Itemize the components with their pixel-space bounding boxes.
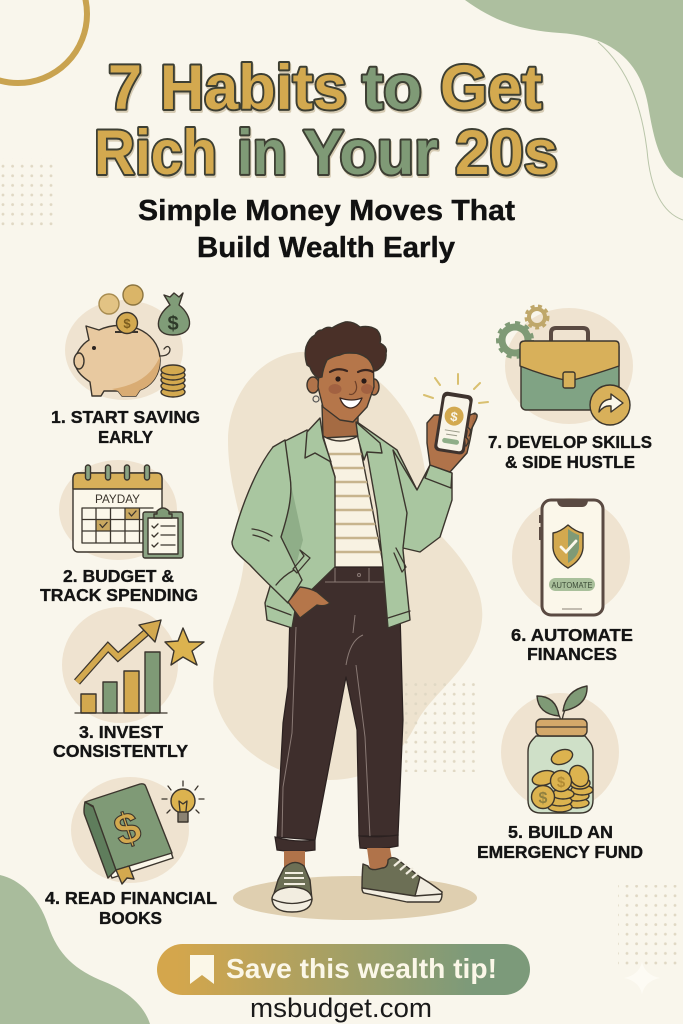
left shoe — [272, 862, 312, 912]
label: 6. AUTOMATE — [511, 625, 633, 645]
panel: habit 3 — [53, 607, 204, 761]
jacket right panel — [357, 422, 417, 628]
ear right — [369, 379, 379, 395]
label: 4. READ FINANCIAL — [45, 888, 217, 908]
icon: phone with shield — [512, 498, 630, 616]
label — [511, 625, 633, 664]
title: Habits — [160, 53, 347, 123]
icon: coin jar with sprout — [501, 686, 619, 813]
label: TRACK SPENDING — [40, 585, 198, 605]
icon: payday calendar and checklist: PAYDAY — [95, 492, 140, 506]
jacket body shadow — [281, 480, 303, 565]
face — [318, 353, 374, 422]
label: 2. BUDGET & — [63, 566, 174, 586]
decorative bottom-left green blob — [0, 875, 150, 1024]
panel: habit 2 — [40, 460, 198, 605]
raised hand — [427, 413, 475, 472]
call to action pill — [157, 944, 530, 995]
beige blob behind the person — [213, 352, 482, 780]
right shoe — [362, 858, 442, 902]
title: Your — [303, 118, 438, 188]
smile — [340, 398, 362, 408]
dot grid over blob — [405, 680, 477, 772]
panel: habit 6 — [511, 498, 633, 664]
icon: piggy bank: $ — [123, 316, 131, 331]
hair — [305, 322, 386, 378]
icon: piggy bank: $ — [167, 313, 179, 335]
jacket details — [252, 465, 452, 618]
subtitle — [138, 195, 515, 264]
label: 1. START SAVING — [51, 407, 200, 427]
label: 7. DEVELOP SKILLS — [488, 432, 652, 452]
label: EMERGENCY FUND — [477, 842, 643, 862]
label: FINANCES — [527, 644, 617, 664]
panel: habit 4 — [45, 777, 217, 928]
label: 3. INVEST — [79, 722, 163, 742]
label: CONSISTENTLY — [53, 741, 188, 761]
title: in — [237, 118, 287, 188]
pill text: Save this wealth tip! — [226, 953, 497, 984]
label: BOOKS — [99, 908, 162, 928]
label: 5. BUILD AN — [508, 822, 613, 842]
trouser details — [282, 568, 384, 837]
title: 20s — [455, 118, 558, 188]
icon: coin jar with sprout: $ — [557, 774, 566, 791]
ankles — [284, 848, 392, 870]
neck — [322, 405, 358, 438]
label — [488, 432, 652, 472]
label — [53, 722, 188, 761]
pocket hand — [288, 587, 330, 618]
panel: habit 1 — [51, 285, 200, 447]
icon: briefcase, gears and arrow — [498, 306, 633, 425]
subtitle: Simple Money Moves That — [138, 195, 515, 227]
jacket collars — [305, 418, 382, 462]
website footer: msbudget.com — [250, 993, 432, 1023]
icon: bookmark — [190, 955, 214, 984]
title: Get — [440, 53, 542, 123]
left jacket sleeve — [232, 440, 302, 603]
decorative top-left gold ring — [0, 0, 87, 83]
icon: finance book and light bulb: $ — [108, 802, 147, 856]
icon: growth chart and star — [62, 607, 204, 723]
cheeks — [328, 384, 373, 394]
phone — [433, 391, 473, 455]
trouser cuffs — [275, 835, 398, 852]
panel: habit 7 — [488, 306, 652, 472]
phone shine rays — [424, 374, 488, 403]
decorative sparkle — [624, 962, 660, 994]
eyes and brows — [330, 369, 373, 394]
person illustration — [232, 322, 488, 912]
icon: phone with shield: AUTOMATE — [552, 581, 592, 590]
decorative dot grids — [0, 158, 683, 967]
decorative top-right green blob — [465, 0, 683, 220]
title: to — [362, 53, 422, 123]
icon: finance book and light bulb — [71, 777, 204, 884]
title — [94, 53, 558, 188]
ground shadow — [233, 876, 477, 920]
label — [51, 407, 200, 447]
panel: habit 5 — [477, 686, 643, 862]
label: & SIDE HUSTLE — [505, 452, 635, 472]
jacket left panel — [265, 430, 335, 628]
phone: $ — [449, 409, 460, 425]
label — [40, 566, 198, 605]
shirt — [324, 436, 382, 566]
label — [45, 888, 217, 928]
fingers — [465, 414, 477, 446]
icon: payday calendar and checklist — [59, 460, 183, 560]
icon: piggy bank — [65, 285, 190, 400]
label — [477, 822, 643, 862]
title: 7 — [108, 53, 142, 123]
subtitle: Build Wealth Early — [197, 232, 455, 264]
label: EARLY — [98, 427, 153, 447]
right jacket sleeve — [393, 450, 452, 552]
title: Rich — [94, 118, 217, 188]
trousers — [277, 567, 403, 840]
ear left and earring — [307, 377, 319, 402]
icon: coin jar with sprout: $ — [539, 790, 548, 807]
